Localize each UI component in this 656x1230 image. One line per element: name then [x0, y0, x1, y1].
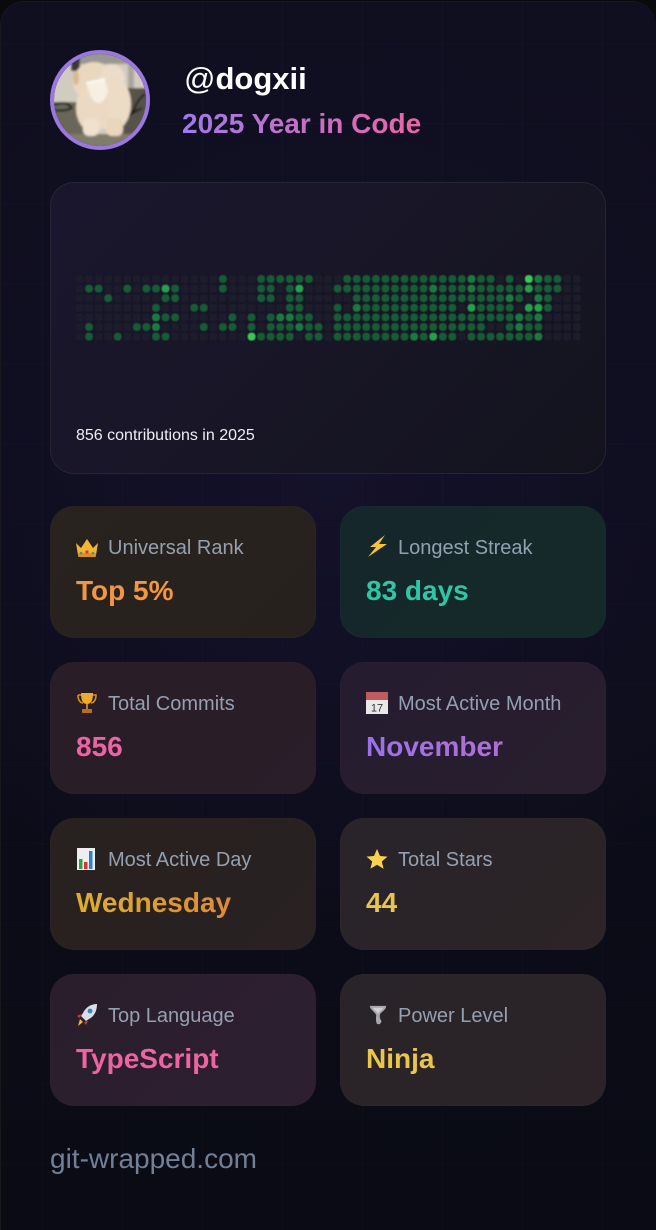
value: Top 5%	[76, 575, 173, 606]
stat card: total commits	[50, 662, 316, 794]
stat card: most active day	[50, 818, 316, 950]
label: Most Active Day	[108, 849, 251, 871]
value: Ninja	[366, 1043, 434, 1074]
stat card: total stars	[340, 818, 606, 950]
label: Most Active Month	[398, 693, 561, 715]
value: 83 days	[366, 575, 469, 606]
value: 44	[366, 887, 397, 918]
footer site name: git-wrapped.com	[50, 1143, 257, 1174]
icon: trophy	[77, 693, 97, 713]
icon: rocket	[77, 1004, 97, 1026]
icon: star	[366, 849, 388, 869]
label: Total Commits	[108, 693, 235, 715]
value: Wednesday	[76, 887, 231, 918]
contributions caption: 856 contributions in 2025	[76, 427, 255, 444]
value: November	[366, 731, 503, 762]
label: Universal Rank	[108, 537, 244, 559]
icon: crown	[76, 539, 98, 557]
stat card: most active month	[340, 662, 606, 794]
icon: calendar	[366, 692, 388, 714]
icon: tornado	[370, 1006, 386, 1024]
panel: contribution graph	[50, 182, 606, 474]
label: Power Level	[398, 1005, 508, 1027]
stat card: top language	[50, 974, 316, 1106]
contribution heatmap	[84, 274, 580, 342]
label: Longest Streak	[398, 537, 533, 559]
subtitle: 2025 Year in Code	[182, 108, 421, 139]
label: Total Stars	[398, 849, 492, 871]
stat card: universal rank	[50, 506, 316, 638]
value: TypeScript	[76, 1043, 219, 1074]
label: Top Language	[108, 1005, 235, 1027]
icon: lightning	[368, 535, 387, 557]
username: @dogxii	[184, 61, 307, 96]
icon: bar chart	[77, 848, 95, 870]
avatar	[50, 50, 150, 150]
stat card: power level	[340, 974, 606, 1106]
stat card: longest streak	[340, 506, 606, 638]
value: 856	[76, 731, 123, 762]
